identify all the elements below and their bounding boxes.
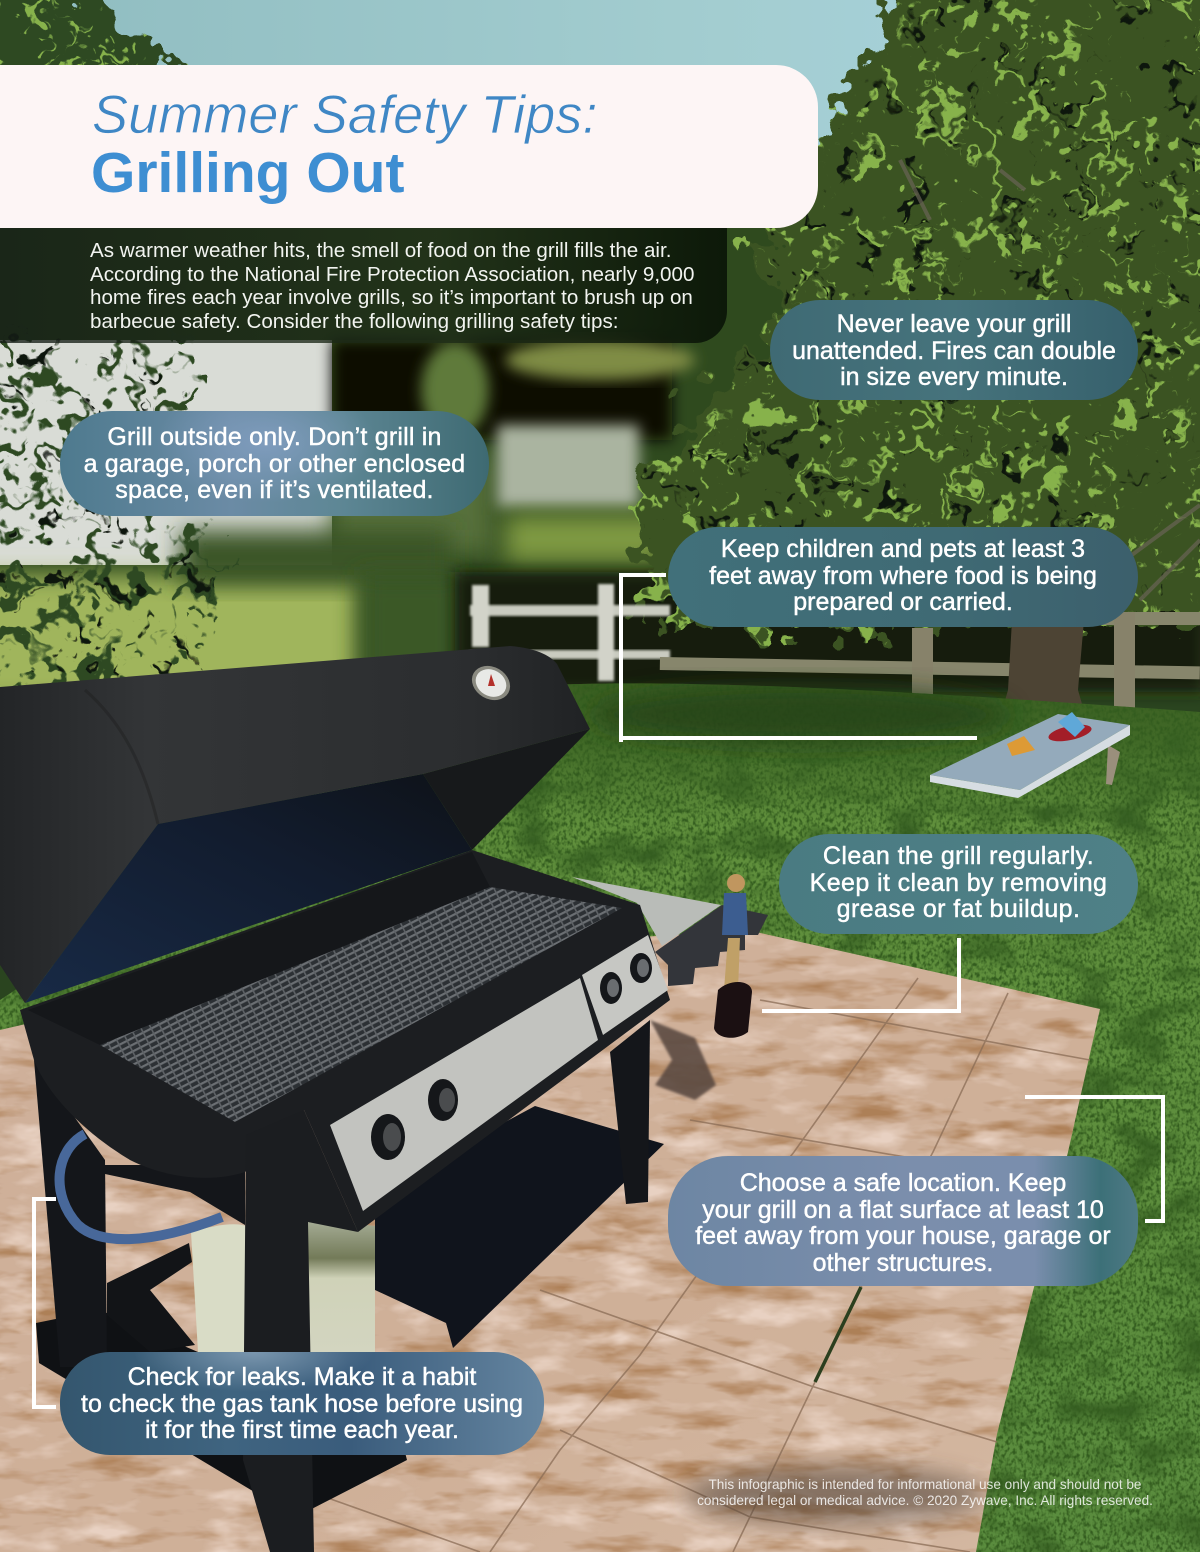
bracket: children and pets area: [619, 573, 666, 742]
tip: choose a safe location: feet away from your house, garage or: [695, 1222, 1111, 1250]
sky: [0, 0, 1200, 200]
intro panel: home fires each year involve grills, so it’s important to brush up on: [90, 286, 693, 309]
knobs: [371, 953, 652, 1160]
right leg: [610, 1020, 650, 1204]
intro panel: barbecue safety. Consider the following grilling safety tips:: [90, 310, 618, 332]
tree foliage top left: [0, 0, 190, 85]
tip: choose a safe location: your grill on a flat surface at least 10: [702, 1196, 1104, 1224]
bottom strut: [107, 1243, 195, 1352]
tip: keep children and pets away: prepared or carried.: [793, 588, 1013, 616]
bottle: [722, 874, 748, 935]
cooking grate: [100, 887, 622, 1122]
bracket: safe location foot: [1145, 1219, 1165, 1223]
tree trunk: [996, 620, 1090, 732]
bracket: children lower line: [619, 736, 977, 740]
propane tank left: [191, 1224, 246, 1352]
tip: choose a safe location: Choose a safe location. Keep: [740, 1169, 1066, 1197]
intro panel: [0, 228, 727, 343]
tip: grill outside only: Grill outside only. Don’t grill in: [107, 423, 442, 451]
control panel silver: [330, 978, 598, 1211]
propane tank right: [306, 1218, 375, 1352]
bottom frame: [36, 1310, 407, 1517]
tip: clean the grill: [779, 834, 1138, 934]
tip: check for leaks: it for the first time each year.: [145, 1416, 459, 1444]
tip: keep children and pets away: Keep children and pets at least 3: [721, 535, 1085, 563]
tip: clean the grill: grease or fat buildup.: [837, 895, 1080, 923]
gas grill: [0, 646, 768, 1552]
lid outer: [0, 646, 590, 1003]
gas hose: [60, 1134, 222, 1239]
tree foliage left: [0, 340, 230, 700]
title line 2: Grilling Out: [91, 141, 404, 205]
title line 1: Summer Safety Tips:: [92, 85, 598, 145]
lawn: [0, 683, 1200, 1552]
tip: grill outside only: [60, 411, 489, 516]
lid underside: [423, 729, 590, 850]
intro panel: As warmer weather hits, the smell of food on the grill fills the air.: [90, 239, 671, 262]
tip: check for leaks: [60, 1352, 544, 1455]
tip: never leave unattended: [770, 300, 1138, 400]
bracket: gas hose: [32, 1197, 56, 1409]
disclaimer: This infographic is intended for informational use only and should not be: [708, 1477, 1142, 1492]
tip: keep children and pets away: feet away from where food is being: [709, 562, 1097, 590]
grill body base: [20, 850, 670, 1232]
bowl strut: [105, 1165, 245, 1225]
tree branches: [900, 160, 1200, 600]
tip: check for leaks: to check the gas tank hose before using: [81, 1390, 523, 1418]
tip: choose a safe location: [668, 1156, 1138, 1286]
side table: [572, 877, 721, 946]
cornhole board: [930, 712, 1130, 798]
title banner: [0, 65, 818, 228]
tip: grill outside only: space, even if it’s ventilated.: [115, 476, 434, 504]
back wall: [28, 852, 490, 1045]
tip: choose a safe location: other structures.: [813, 1248, 993, 1276]
intro panel: According to the National Fire Protection Association, nearly 9,000: [90, 262, 694, 286]
left leg: [34, 1060, 107, 1367]
lid thermometer: [466, 659, 516, 707]
tip: never leave unattended: in size every minute.: [840, 363, 1068, 391]
grill brush: [714, 938, 752, 1038]
disclaimer: considered legal or medical advice. © 2020 Zywave, Inc. All rights reserved.: [697, 1493, 1153, 1508]
tip: check for leaks: Check for leaks. Make it a habit: [128, 1363, 476, 1391]
tip: keep children and pets away: [668, 527, 1138, 627]
back fence: [470, 584, 1200, 710]
tree foliage right: [640, 0, 1200, 625]
tip: never leave unattended: Never leave your grill: [837, 310, 1071, 338]
lower shelf: [375, 1106, 664, 1348]
tip: clean the grill: Clean the grill regularly.: [823, 842, 1094, 870]
tip: never leave unattended: unattended. Fires can double: [792, 336, 1116, 364]
stone patio: [0, 930, 1100, 1552]
center leg: [243, 1110, 358, 1552]
side rack: [655, 905, 768, 986]
tip: clean the grill: Keep it clean by removing: [810, 868, 1107, 896]
side panel silver: [582, 935, 668, 1035]
bracket: clean grill brush: [762, 938, 961, 1013]
blurred backyard behind: [0, 200, 1200, 705]
disclaimer: [697, 1477, 1153, 1508]
lid interior: [25, 774, 472, 1003]
bracket: safe location: [1025, 1095, 1165, 1223]
tip: grill outside only: a garage, porch or other enclosed: [84, 450, 465, 478]
